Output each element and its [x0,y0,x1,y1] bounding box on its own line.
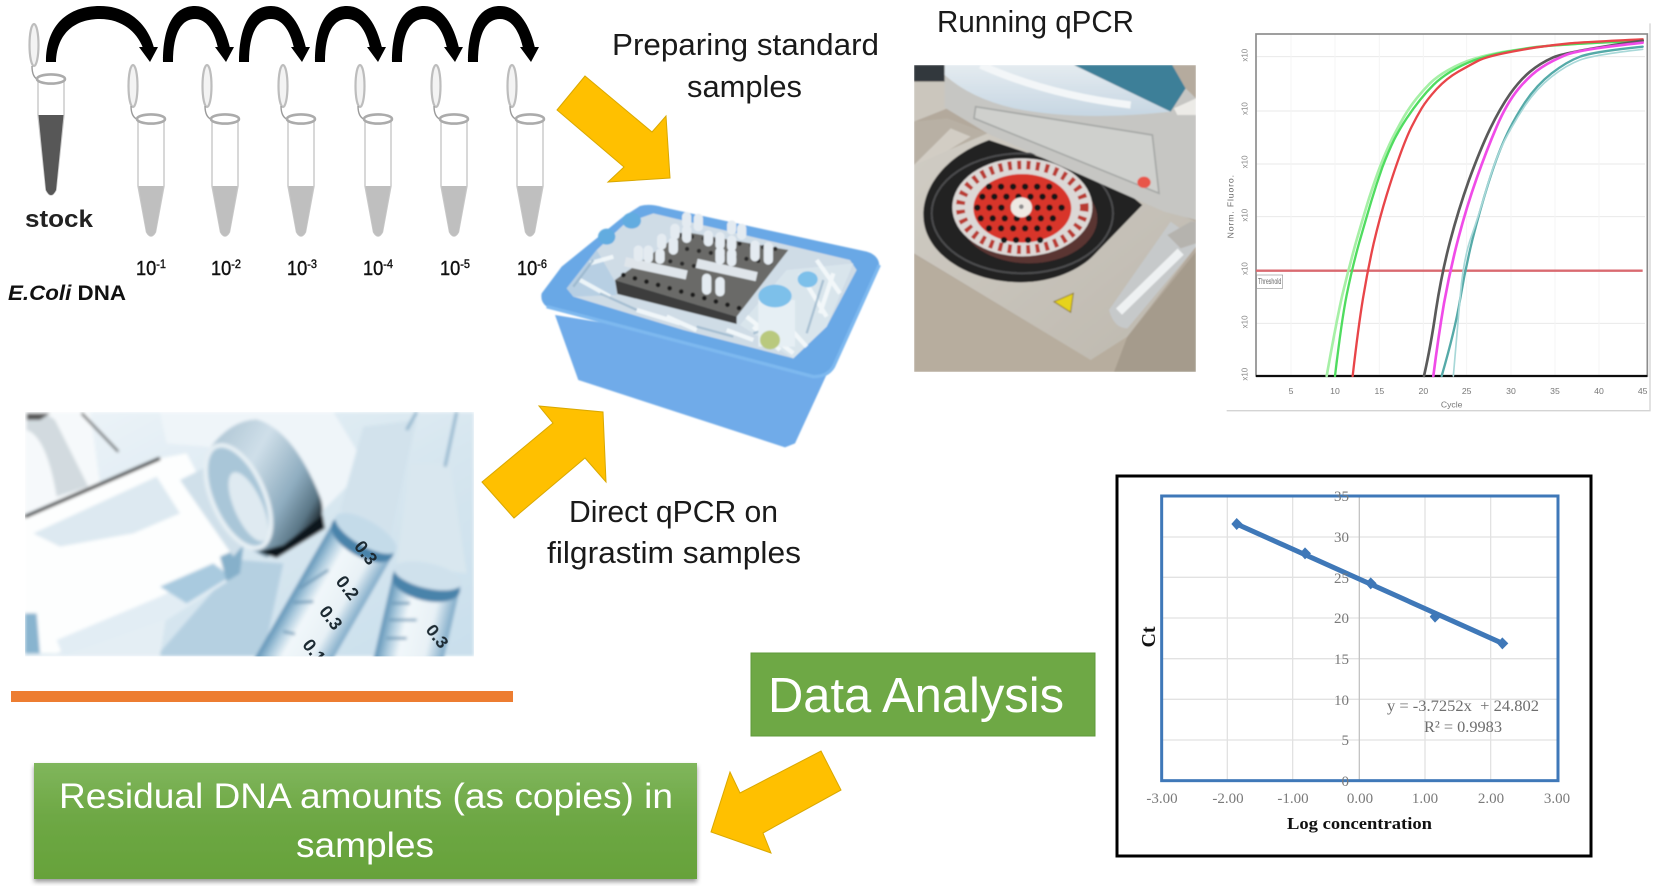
icon: dilution tube 10-6 [508,65,544,236]
y axis ticks: x10 [1240,208,1249,222]
y axis ticks: x10 [1240,102,1249,115]
vial cap [208,419,322,557]
curve: magenta [1433,43,1643,376]
rotor chamber [923,140,1142,282]
label: 10-6: -6 [537,257,547,271]
syringe scale numbers: 0.2 [332,572,363,604]
x axis ticks: 35 [1550,386,1560,396]
chart: amplification curves [1225,23,1650,411]
x axis ticks: 40 [1594,386,1604,396]
box: data analysis [751,653,1095,736]
regression equation: R² = 0.9983 [1424,719,1502,736]
arrow: data analysis to residual DNA [711,751,841,853]
lid [945,65,1196,220]
label: 10-5: -5 [460,257,470,271]
heading: preparing standard samples: samples [687,69,802,104]
image: vial and syringes [25,412,474,656]
x axis ticks: 30 [1506,386,1516,396]
syringe scale numbers: 0.3 [422,620,453,652]
syringe scale numbers: 0.1 [299,635,330,667]
vial body [25,453,240,653]
syringe barrel 2 [372,563,462,656]
regression line and points [1231,518,1508,649]
icon: dilution tube 10-3 [278,65,315,236]
grid [1162,496,1558,781]
y axis ticks: 0 [1342,774,1349,790]
y axis ticks [1334,489,1349,790]
chart: standard curve [1117,476,1591,856]
arrow: transfer 5 to 6 [468,6,539,62]
syringe scale numbers [304,541,448,656]
heading: running qPCR: Running qPCR [937,4,1134,39]
syringe hubs [347,423,412,486]
crushed ice [567,213,857,358]
y axis ticks: x10 [1240,155,1249,168]
x axis ticks: -2.00 [1212,791,1244,807]
y axis title: Norm. Fluoro. [1225,175,1235,238]
label: 10-1: -1 [156,257,166,271]
handle [1109,222,1196,328]
box: data analysis: Data Analysis [768,669,1064,723]
icon: dilution tube 10-2 [202,65,239,236]
label: 10-3: -3 [307,257,317,271]
curve: light green [1327,41,1643,376]
arrow: transfer 1 to 2 [163,6,234,62]
y axis ticks: 20 [1334,611,1349,627]
divider bar [11,691,513,702]
chart frame [1117,476,1591,856]
x axis title: Cycle [1441,399,1463,409]
x axis ticks: 10 [1330,386,1340,396]
y axis ticks: x10 [1240,262,1249,275]
syringe scale numbers: 0.3 [315,602,346,634]
text: direct qPCR on filgrastim samples: filgrastim samples [547,535,801,570]
y axis ticks: x10 [1240,315,1249,328]
syringe barrel 1 [253,513,396,656]
rotor [952,158,1097,263]
regression equation: y = -3.7252x + 24.802 [1387,698,1539,715]
threshold label: Threshold [1258,276,1281,286]
x axis ticks: 3.00 [1544,791,1570,807]
threshold label [1257,275,1283,288]
label: 10-2: -2 [231,257,241,271]
icon: warning triangle [1054,293,1073,312]
curve: gray [1424,41,1643,376]
sample rack [615,217,788,324]
icon: stock tube [30,24,65,195]
y axis ticks: 35 [1334,489,1349,505]
heading: preparing standard samples: Preparing standard [612,27,879,62]
image: real-time PCR cycler [914,65,1196,372]
x axis ticks: 0.00 [1347,791,1373,807]
curve: light teal [1453,49,1643,376]
y axis ticks: 15 [1334,652,1349,668]
icon: dilution tube 10-5 [432,65,468,236]
icon: dilution tube 10-1 [128,65,165,236]
label: 10-1: 10 [136,258,158,280]
x axis ticks: -3.00 [1146,791,1178,807]
arrow: stock to first dilution [46,6,158,62]
label: 10-6: 10 [517,258,539,280]
y axis ticks: 5 [1342,733,1349,749]
label: stock: stock [25,206,94,233]
x axis title: Log concentration [1287,814,1433,833]
y axis ticks: x10 [1240,367,1249,381]
y axis ticks [1240,48,1249,381]
label: 10-2: 10 [211,258,233,280]
table shadow [157,560,283,656]
heading: preparing standard samples [612,27,879,104]
vial neck [180,470,241,558]
blue caps and bottle [598,229,615,245]
label: 10-3: 10 [287,258,309,280]
x axis ticks: 2.00 [1478,791,1504,807]
icon: dilution tube 10-4 [356,65,392,236]
label: 10-5: 10 [440,258,462,280]
threshold line [1256,267,1643,274]
outer frame lines [1227,23,1650,411]
x axis ticks [1289,386,1648,396]
y axis ticks: 10 [1334,693,1349,709]
panel: serial dilution of E. coli DNA [8,6,547,305]
x axis ticks [1146,791,1570,807]
instrument base [914,133,1196,360]
label: 10-4: 10 [363,258,385,280]
curve: teal [1442,47,1643,376]
box: residual DNA amounts: samples [296,826,434,865]
x axis ticks: 45 [1638,386,1648,396]
y axis ticks: 30 [1334,530,1349,546]
curve: green [1335,41,1643,376]
syringe scale numbers: 0.3 [350,537,381,569]
arrow: transfer 4 to 5 [392,6,463,62]
box: residual DNA amounts: Residual DNA amounts (as copies) in [59,777,673,816]
x axis ticks: 5 [1289,386,1294,396]
arrow: standards to ice box [557,76,670,182]
curve: red [1353,39,1643,376]
y axis ticks: 25 [1334,571,1349,587]
arrow: transfer 2 to 3 [239,6,310,62]
box rim [541,205,879,377]
label: E. coli DNA: E.Coli DNA [8,282,126,305]
box body [555,315,833,447]
x axis ticks: 15 [1375,386,1384,396]
plot border [1162,496,1558,781]
regression equation [1387,698,1539,736]
x axis ticks: 20 [1419,386,1428,396]
text: direct qPCR on filgrastim samples [547,494,801,570]
x axis ticks: 1.00 [1412,791,1438,807]
image: ice box with samples [541,205,879,447]
x axis ticks: 25 [1462,386,1472,396]
arrow: transfer 3 to 4 [315,6,386,62]
x axis ticks: -1.00 [1277,791,1309,807]
label: 10-4: -4 [383,257,393,271]
text: direct qPCR on filgrastim samples: Direct qPCR on [569,494,778,529]
y axis title: Ct [1138,626,1160,648]
box: residual DNA amounts [34,763,697,879]
arrow: filgrastim samples to ice box [482,406,606,518]
y axis ticks: x10 [1240,48,1249,62]
